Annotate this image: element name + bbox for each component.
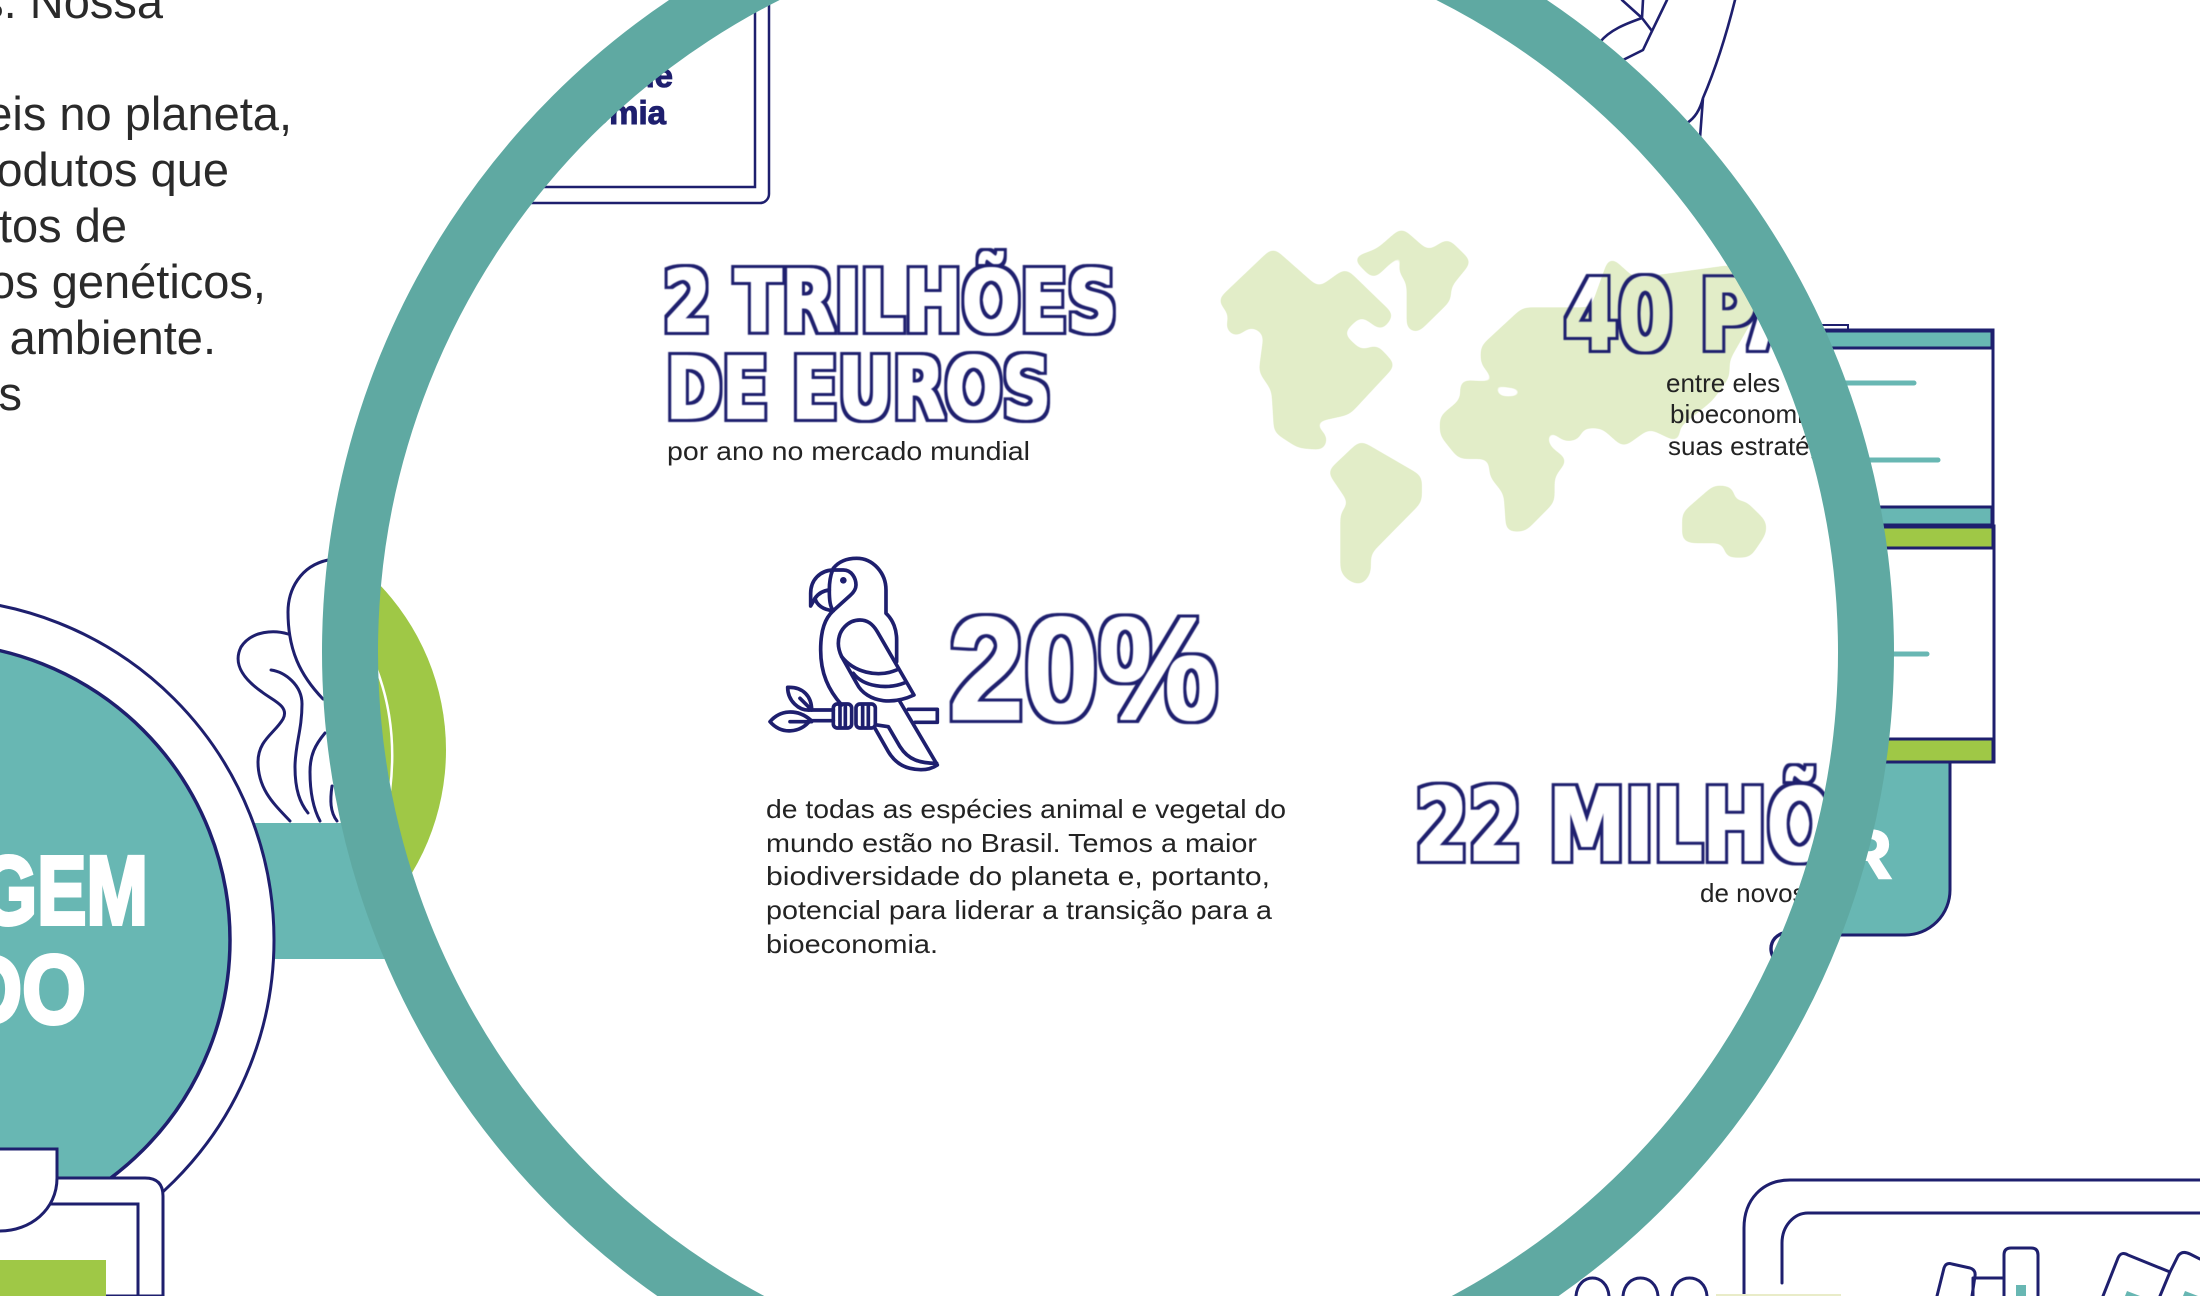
stat: 40 países: 40 PAÍSES bbox=[1564, 259, 2004, 372]
stat: 2 trilhões de euros bbox=[663, 251, 1117, 466]
icon: top-right plant lines bbox=[1600, 0, 1735, 138]
large circle with heading bbox=[0, 604, 276, 1193]
card: top inside ring bbox=[531, 4, 770, 204]
button: teal panel bbox=[1840, 764, 1952, 936]
paragraph: 20% description: de todas as espécies animal e vegetal do bbox=[766, 794, 1286, 824]
card: top inside ring: bioeconomia bbox=[462, 94, 667, 131]
white arc on green circle bbox=[377, 670, 392, 791]
green circle inside ring bbox=[378, 586, 446, 873]
panel stack: bottom bbox=[1884, 524, 1996, 764]
paragraph: 20% description: mundo estão no Brasil. Temos a maior bbox=[766, 828, 1257, 858]
paragraph: 20% description: bioeconomia. bbox=[766, 929, 938, 959]
stat: 22 milhões: 22 MILHÕES bbox=[1415, 766, 1940, 884]
pale strip at bottom edge bbox=[1716, 1294, 1841, 1296]
paragraph: 20% description: biodiversidade do planeta e, portanto, bbox=[766, 861, 1270, 891]
stat: 2 trilhões de euros: por ano no mercado mundial bbox=[667, 436, 1030, 466]
stat: 2 trilhões de euros: 2 TRILHÕES bbox=[663, 251, 1117, 352]
stat: 40 países bbox=[1562, 272, 1812, 458]
paragraph: 20% description: potencial para liderar a transição para a bbox=[766, 895, 1273, 925]
card: top inside ring: Potencial de bbox=[479, 57, 673, 94]
connector band: teal bbox=[255, 823, 384, 959]
icon: three loops at bottom bbox=[1576, 1278, 1707, 1296]
paragraph: 20% description bbox=[766, 794, 1286, 959]
stat: 22 milhões bbox=[1416, 762, 1825, 957]
stat: 40 países: bioeconomia em bbox=[1670, 399, 1861, 429]
panel stack: top bbox=[1822, 324, 1994, 524]
button: teal panel: SABER bbox=[1647, 815, 1892, 893]
bottom-right frame with books bbox=[1744, 1180, 2200, 1296]
body text: left paragraph bbox=[0, 0, 292, 420]
stat: 40 países: entre eles o Brasil, têm a bbox=[1666, 368, 1954, 398]
icon: leaf outlines bbox=[238, 560, 337, 821]
icon: parrot on branch bbox=[770, 558, 937, 770]
stat: 40 países: suas estratégias bbox=[1668, 431, 1857, 461]
stat: 22 milhões: de novos empregos bbox=[1700, 878, 1928, 908]
stat: 20%: 20% bbox=[949, 587, 1218, 750]
stat: 2 trilhões de euros: DE EUROS bbox=[666, 340, 1051, 439]
inside content layer bbox=[0, 0, 2004, 989]
magnifier ring bbox=[350, 0, 1866, 1296]
card: bottom left bbox=[0, 1149, 163, 1296]
world map bbox=[1220, 230, 1764, 583]
